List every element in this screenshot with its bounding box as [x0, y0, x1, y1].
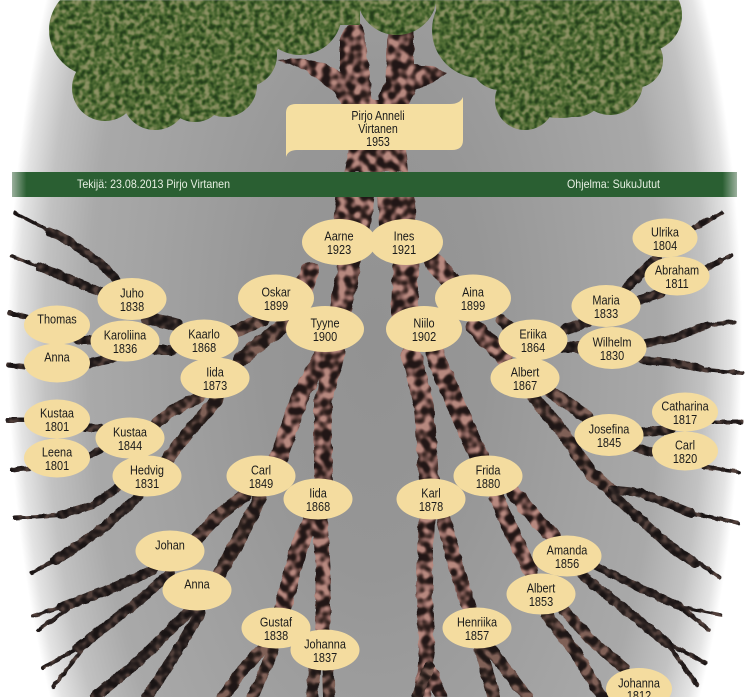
node: Gustaf: 1838: [264, 628, 288, 643]
node: Wilhelm: [578, 327, 646, 369]
author credit: Tekijä: 23.08.2013 Pirjo Virtanen: [77, 177, 230, 191]
node: Tyyne: 1900: [313, 329, 337, 344]
ancestor nodes: [24, 218, 718, 697]
node: Ines: Ines: [394, 229, 414, 244]
node: Albert 1853: 1853: [529, 594, 553, 609]
node: Josefina: 1845: [597, 435, 621, 450]
footer band: [12, 172, 737, 197]
node: Eriika: 1864: [521, 340, 545, 355]
node: Eriika: Eriika: [519, 327, 547, 342]
node: Maria: Maria: [592, 293, 620, 308]
node: Albert 1867: [490, 358, 560, 398]
node: Amanda: [532, 536, 602, 576]
node: Carl 1820: Carl: [675, 438, 695, 453]
node: Albert 1853: Albert: [527, 581, 556, 596]
node: Johanna 1812: Johanna: [618, 676, 660, 691]
node: Maria: [572, 285, 640, 327]
node: Juho: 1838: [120, 299, 144, 314]
node: Kaarlo: [170, 320, 238, 360]
node: Iida 1868: [284, 478, 352, 520]
tree trunk above the band: [277, 15, 448, 172]
node: Oskar: Oskar: [261, 285, 291, 300]
node: Ines: [369, 219, 443, 265]
node: Karoliina: Karoliina: [104, 328, 147, 343]
node: Kaarlo: 1868: [192, 340, 216, 355]
node: Abraham: [644, 256, 710, 296]
node: Hedvig: Hedvig: [130, 463, 164, 478]
node: Niilo: 1902: [412, 329, 436, 344]
node: Abraham: 1811: [665, 276, 689, 291]
name label: Pirjo Anneli Virtanen 1953: [286, 97, 463, 157]
roots: inner pink branches: [277, 195, 554, 697]
node: Hedvig: 1831: [135, 476, 159, 491]
node: Niilo: [386, 306, 462, 352]
node: Kustaa 1801: 1801: [45, 419, 69, 434]
node: Kustaa 1801: [24, 400, 90, 438]
node: Carl 1849: 1849: [249, 476, 273, 491]
program credit: Ohjelma: SukuJutut: [567, 177, 661, 191]
tree canopy: [49, 0, 682, 130]
node: Carl 1820: 1820: [673, 451, 697, 466]
node: Kustaa 1801: Kustaa: [40, 406, 74, 421]
node: Johan: Johan: [155, 538, 185, 553]
node: Kustaa 1844: Kustaa: [113, 425, 147, 440]
node: Niilo: Niilo: [413, 316, 435, 331]
node: Iida 1873: 1873: [203, 378, 227, 393]
node: Kustaa 1844: 1844: [118, 438, 142, 453]
node: Iida 1868: Iida: [309, 486, 327, 501]
node: Oskar: [238, 274, 314, 322]
node: Catharina: Catharina: [661, 399, 709, 414]
roots: dark outer branches: [8, 213, 742, 697]
node: Karoliina: [90, 320, 160, 362]
node: Gustaf: Gustaf: [260, 615, 293, 630]
node: Tyyne: Tyyne: [310, 316, 340, 331]
node: Carl 1849: [226, 456, 296, 496]
name label: Pirjo Anneli Virtanen 1953: 1953: [366, 134, 390, 149]
node: Johanna 1837: 1837: [313, 650, 337, 665]
node: Thomas: Thomas: [37, 312, 77, 327]
node: Maria: 1833: [594, 306, 618, 321]
node: Thomas: [24, 306, 90, 344]
node: Henriika: Henriika: [457, 615, 497, 630]
node: Catharina: [652, 392, 718, 432]
node: Oskar: 1899: [264, 298, 288, 313]
node: Wilhelm: 1830: [600, 348, 624, 363]
node: Kaarlo: Kaarlo: [188, 327, 220, 342]
node: Aarne: Aarne: [324, 229, 354, 244]
node: Johanna 1837: Johanna: [304, 637, 346, 652]
node: Carl 1849: Carl: [251, 463, 271, 478]
node: Anna (lower): Anna: [184, 577, 210, 592]
node: Ulrika: [632, 218, 698, 258]
node: Aina: 1899: [461, 298, 485, 313]
node: Albert 1853: [506, 574, 576, 614]
node: Josefina: Josefina: [589, 422, 630, 437]
node: Albert 1867: Albert: [511, 365, 540, 380]
node: Aarne: [302, 219, 376, 265]
node: Eriika: [498, 320, 568, 360]
node: Frida: 1880: [476, 476, 500, 491]
node: Wilhelm: Wilhelm: [593, 335, 631, 350]
node: Karoliina: 1836: [113, 341, 137, 356]
node: Johan: [136, 530, 204, 572]
node: Henriika: [442, 608, 512, 648]
node: Abraham: Abraham: [655, 263, 699, 278]
node: Iida 1868: 1868: [306, 499, 330, 514]
node: Johanna 1837: [290, 630, 360, 670]
node: Ulrika: 1804: [653, 238, 677, 253]
node: Anna: Anna: [44, 350, 70, 365]
node: Amanda: Amanda: [547, 543, 588, 558]
node: Frida: Frida: [476, 463, 501, 478]
node: Aina: Aina: [462, 285, 484, 300]
node: Anna (lower): [162, 570, 232, 610]
node: Carl 1820: [652, 432, 718, 470]
node: Leena: 1801: [45, 458, 69, 473]
node: Johanna 1812: [606, 668, 672, 697]
node: Josefina: [574, 414, 644, 456]
node: Juho: [98, 278, 166, 320]
node: Kustaa 1844: [96, 418, 164, 458]
node: Ines: 1921: [392, 242, 416, 257]
roots: mid mottled branches: [157, 320, 624, 697]
node: Leena: [24, 438, 90, 478]
node: Amanda: 1856: [555, 556, 579, 571]
node: Aarne: 1923: [327, 242, 351, 257]
node: Henriika: 1857: [465, 628, 489, 643]
node: Albert 1867: 1867: [513, 378, 537, 393]
node: Karl: Karl: [421, 486, 441, 501]
node: Karl: 1878: [419, 499, 443, 514]
node: Gustaf: [242, 608, 310, 648]
node: Iida 1873: [180, 358, 250, 398]
node: Tyyne: [286, 306, 364, 352]
node: Ulrika: Ulrika: [651, 225, 679, 240]
node: Catharina: 1817: [673, 412, 697, 427]
node: Anna: [24, 344, 90, 382]
node: Frida: [454, 456, 522, 496]
node: Karl: [396, 478, 466, 520]
node: Juho: Juho: [120, 286, 144, 301]
name label: Pirjo Anneli Virtanen 1953: Pirjo Anneli: [351, 108, 405, 123]
node: Aina: [435, 274, 511, 322]
node: Leena: Leena: [42, 445, 72, 460]
name label: Pirjo Anneli Virtanen 1953: Virtanen: [358, 121, 398, 136]
node: Hedvig: [112, 456, 182, 496]
node: Iida 1873: Iida: [206, 365, 224, 380]
